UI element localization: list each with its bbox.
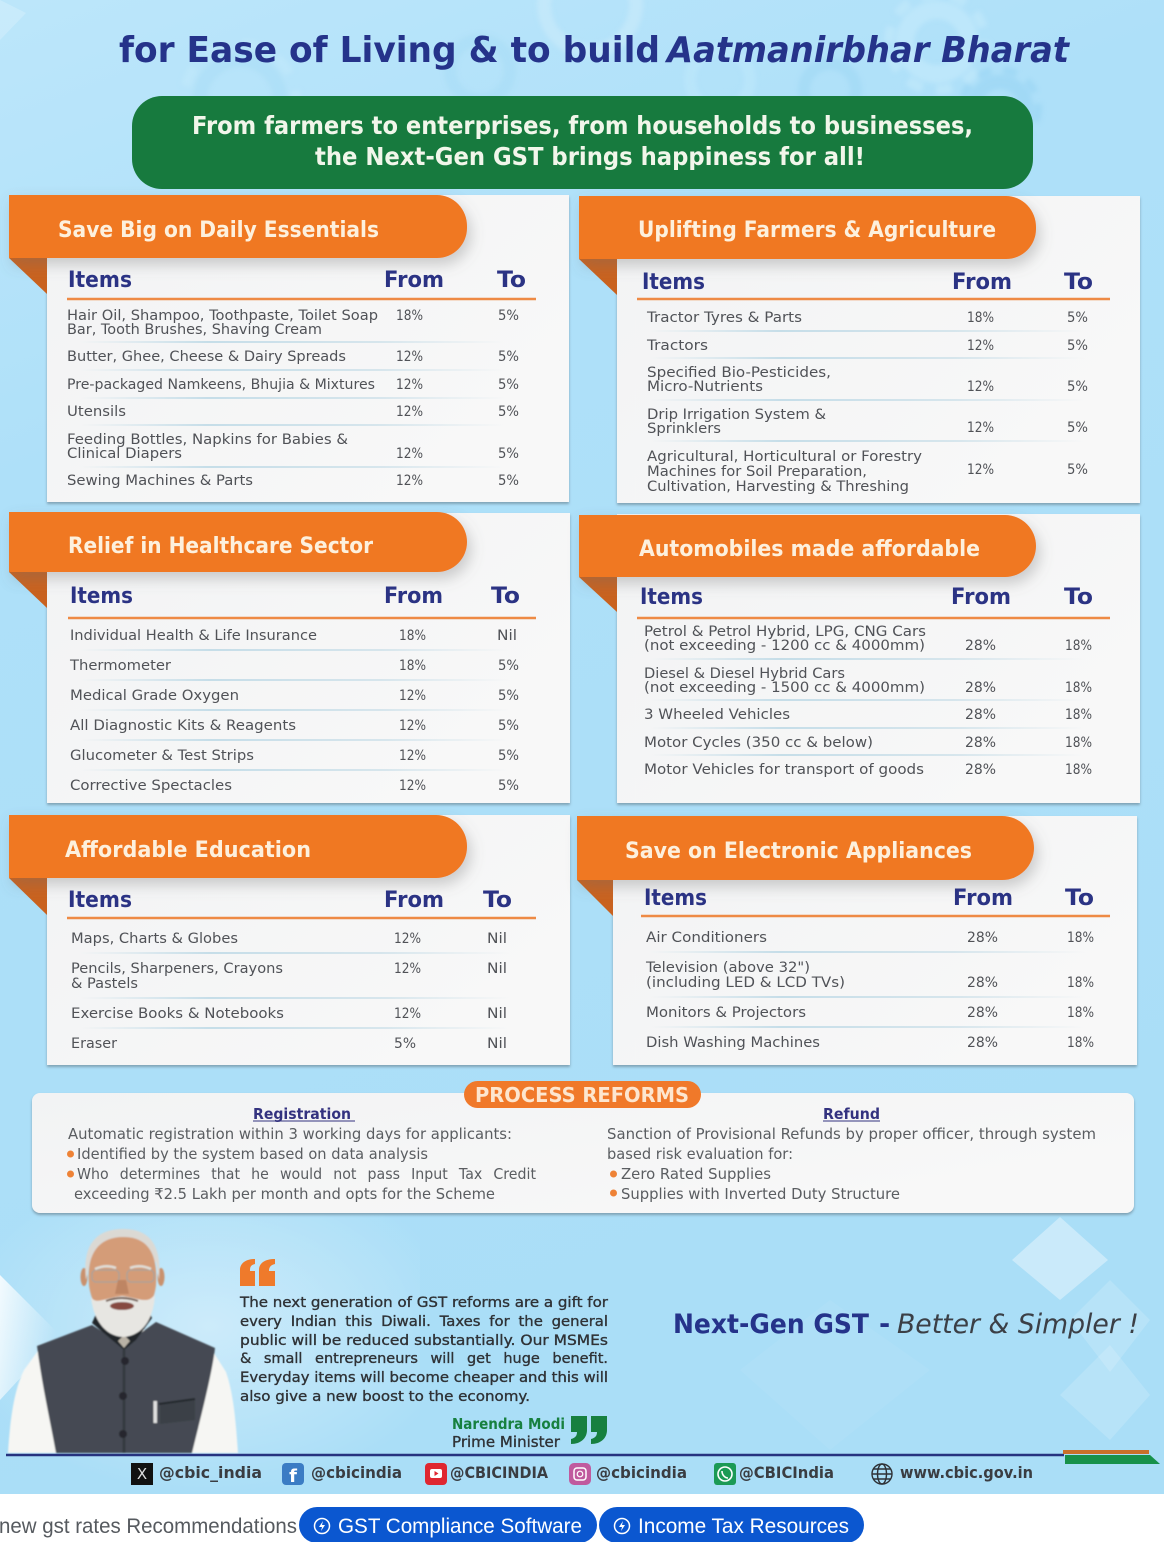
table rows: 5%	[498, 748, 519, 764]
quote text: Everyday items will become cheaper and this will	[240, 1370, 608, 1386]
handle: Facebook: @cbicindia	[311, 1463, 402, 1482]
icon: closing quote	[571, 1416, 607, 1444]
table rows: Diesel & Diesel Hybrid Cars	[644, 666, 845, 682]
table rows: Specified Bio-Pesticides,	[647, 365, 831, 381]
refund column: Supplies with Inverted Duty Structure	[621, 1185, 900, 1203]
table rows: Air Conditioners	[646, 930, 767, 946]
table header: To	[1065, 886, 1094, 911]
process reforms heading: PROCESS REFORMS	[475, 1083, 689, 1107]
table rows: 5%	[498, 473, 519, 489]
table header	[67, 888, 536, 918]
table rows: 5%	[498, 718, 519, 734]
table rows: Sewing Machines & Parts	[67, 473, 253, 489]
table header: Items	[640, 585, 703, 610]
table rows: 5%	[498, 404, 519, 420]
handle: Instagram: @cbicindia	[596, 1463, 687, 1482]
table rows: 12%	[396, 377, 423, 393]
tab heading	[579, 196, 1036, 259]
panel: Save Big on Daily Essentials	[9, 195, 569, 502]
table header: To	[483, 888, 512, 913]
table rows: 18%	[399, 658, 426, 674]
table rows: 18%	[1065, 680, 1092, 696]
table rows: 12%	[967, 462, 994, 478]
handle: WhatsApp: @CBICIndia	[739, 1463, 834, 1482]
table header	[68, 584, 536, 618]
social row	[131, 1463, 1033, 1487]
icon: X	[131, 1463, 153, 1485]
table rows: 12%	[399, 778, 426, 794]
table rows: Feeding Bottles, Napkins for Babies &	[67, 432, 348, 448]
refund column: Sanction of Provisional Refunds by proper officer, through system	[607, 1125, 1096, 1143]
table rows: 3 Wheeled Vehicles	[644, 707, 790, 723]
table header: From	[953, 886, 1013, 911]
table rows: 5%	[498, 308, 519, 324]
registration column	[67, 1105, 536, 1203]
tab heading	[9, 195, 467, 258]
table rows: 12%	[396, 473, 423, 489]
table rows: 18%	[1065, 707, 1092, 723]
tab heading: Save on Electronic Appliances	[625, 839, 972, 864]
table rows: Bar, Tooth Brushes, Shaving Cream	[67, 322, 322, 338]
table rows: 12%	[399, 718, 426, 734]
table rows: (including LED & LCD TVs)	[646, 975, 845, 991]
table rows	[71, 931, 510, 1052]
table rows: (not exceeding - 1200 cc & 4000mm)	[644, 638, 925, 654]
table rows: 18%	[1065, 638, 1092, 654]
tagline: Next-Gen GST	[673, 1309, 870, 1340]
table rows: Medical Grade Oxygen	[70, 688, 239, 704]
registration column: Who determines that he would not pass Input Tax Credit	[77, 1165, 536, 1183]
table rows: 12%	[396, 404, 423, 420]
table rows: 5%	[498, 446, 519, 462]
table rows: 12%	[396, 446, 423, 462]
quote text	[239, 1295, 608, 1405]
table rows: Utensils	[67, 404, 126, 420]
footer rule and flag	[6, 1450, 1160, 1464]
table rows: 5%	[498, 778, 519, 794]
table header: Items	[68, 268, 132, 293]
attribution: Narendra Modi	[452, 1415, 565, 1433]
tab heading	[9, 512, 467, 572]
table rows: 12%	[399, 688, 426, 704]
table rows: 12%	[399, 748, 426, 764]
table header	[637, 270, 1110, 299]
panel: Uplifting Farmers & Agriculture	[579, 196, 1140, 503]
icon: X: X	[137, 1465, 147, 1483]
table rows: Exercise Books & Notebooks	[71, 1006, 284, 1022]
tab heading	[577, 816, 1034, 880]
table rows: Pencils, Sharpeners, Crayons	[71, 961, 283, 977]
tab heading	[579, 515, 1036, 577]
table rows: Sprinklers	[647, 421, 721, 437]
table rows: 5%	[1067, 462, 1088, 478]
table rows	[69, 628, 519, 794]
table header	[637, 585, 1110, 618]
table rows: Nil	[487, 1036, 507, 1052]
icon: Facebook: f	[289, 1466, 297, 1487]
registration column: Automatic registration within 3 working days for applicants:	[68, 1125, 512, 1143]
tab heading: Uplifting Farmers & Agriculture	[638, 218, 996, 243]
table rows: 28%	[967, 1005, 998, 1021]
banner	[132, 96, 1033, 189]
quote text: also give a new boost to the economy.	[240, 1389, 530, 1405]
tab fold	[579, 259, 617, 295]
table header: From	[384, 584, 443, 609]
refund column	[607, 1105, 1096, 1203]
handle: X: @cbic_india	[159, 1463, 262, 1482]
pill: Income Tax Resources	[599, 1507, 864, 1542]
website: www.cbic.gov.in	[900, 1463, 1033, 1482]
table rows: Clinical Diapers	[67, 446, 182, 462]
table rows: 5%	[498, 688, 519, 704]
tab fold	[9, 258, 47, 294]
table rows: 5%	[1067, 338, 1088, 354]
icon: globe	[872, 1464, 892, 1484]
table rows: Motor Cycles (350 cc & below)	[644, 735, 873, 751]
table header: Items	[642, 270, 705, 295]
table rows: Eraser	[71, 1036, 117, 1052]
table rows: 12%	[967, 338, 994, 354]
table rows: 5%	[1067, 420, 1088, 436]
table rows: Tractors	[646, 338, 708, 354]
table rows: Machines for Soil Preparation,	[647, 464, 867, 480]
quote block	[239, 1259, 608, 1451]
table rows: 18%	[967, 310, 994, 326]
quote text: The next generation of GST reforms are a gift for	[239, 1295, 608, 1311]
registration column: Registration	[253, 1105, 351, 1123]
table rows: Micro-Nutrients	[647, 379, 763, 395]
panel: Relief in Healthcare Sector	[9, 512, 570, 803]
registration column: Identified by the system based on data analysis	[77, 1145, 428, 1163]
table header	[641, 886, 1110, 916]
pill: Income Tax Resources: Income Tax Resources	[638, 1514, 849, 1538]
table rows: Maps, Charts & Globes	[71, 931, 238, 947]
table rows: 18%	[1067, 930, 1094, 946]
table rows: 5%	[498, 349, 519, 365]
panel: Automobiles made affordable	[579, 514, 1140, 803]
table rows: Nil	[487, 961, 507, 977]
tab heading: Affordable Education	[65, 838, 311, 863]
table rows: Television (above 32")	[645, 960, 810, 976]
tab heading: Save Big on Daily Essentials	[58, 218, 379, 243]
panel: Affordable Education	[9, 815, 570, 1065]
table rows: 5%	[498, 377, 519, 393]
title emphasis: Aatmanirbhar Bharat	[664, 30, 1071, 71]
tab fold	[9, 572, 47, 608]
icon: YouTube	[425, 1463, 447, 1485]
table header: Items	[644, 886, 707, 911]
table rows: Thermometer	[69, 658, 171, 674]
table rows: 28%	[965, 735, 996, 751]
tab fold	[579, 577, 617, 612]
table rows: 28%	[967, 975, 998, 991]
registration column: exceeding ₹2.5 Lakh per month and opts for the Scheme	[74, 1185, 495, 1203]
table header: From	[384, 268, 444, 293]
table rows: Drip Irrigation System &	[647, 407, 826, 423]
icon: WhatsApp	[714, 1463, 736, 1485]
quote text: every Indian this Diwali. Taxes for the general	[240, 1314, 608, 1330]
table rows: Corrective Spectacles	[70, 778, 232, 794]
table rows: Dish Washing Machines	[646, 1035, 820, 1051]
table rows: Nil	[497, 628, 517, 644]
tagline: -	[879, 1309, 890, 1340]
table rows: 12%	[394, 1006, 421, 1022]
table rows: Pre-packaged Namkeens, Bhujia & Mixtures	[67, 377, 375, 393]
table rows: 28%	[965, 762, 996, 778]
table header: To	[491, 584, 520, 609]
table header: To	[497, 268, 526, 293]
refund column: Zero Rated Supplies	[621, 1165, 771, 1183]
table rows: 5%	[394, 1036, 416, 1052]
tab heading: Relief in Healthcare Sector	[68, 534, 373, 559]
table header: From	[952, 270, 1012, 295]
tab heading: Automobiles made affordable	[639, 537, 980, 562]
table rows: 18%	[1067, 975, 1094, 991]
handle: YouTube: @CBICINDIA	[450, 1463, 549, 1482]
table rows: 18%	[1067, 1005, 1094, 1021]
refund column: Refund	[823, 1105, 880, 1123]
table rows	[67, 308, 519, 489]
table rows: 12%	[394, 961, 421, 977]
icon: Instagram	[569, 1463, 591, 1485]
table rows: Agricultural, Horticultural or Forestry	[647, 449, 922, 465]
table rows: 12%	[394, 931, 421, 947]
banner: From farmers to enterprises, from households to businesses,	[192, 111, 973, 140]
table header	[67, 268, 536, 299]
table header: To	[1064, 270, 1093, 295]
table rows: All Diagnostic Kits & Reagents	[70, 718, 296, 734]
icon: Facebook	[282, 1463, 304, 1487]
tab fold	[577, 880, 613, 916]
panel: Save on Electronic Appliances	[577, 816, 1137, 1065]
table rows	[645, 930, 1094, 1051]
table rows: Cultivation, Harvesting & Threshing	[647, 479, 909, 495]
table rows: (not exceeding - 1500 cc & 4000mm)	[644, 680, 925, 696]
tab fold	[9, 878, 47, 915]
table rows: 12%	[967, 420, 994, 436]
table rows: Motor Vehicles for transport of goods	[644, 762, 924, 778]
banner: the Next-Gen GST brings happiness for all!	[315, 142, 865, 171]
table rows	[646, 310, 1088, 495]
table rows: 28%	[967, 1035, 998, 1051]
panel: process reforms	[32, 1081, 1134, 1213]
table rows: 5%	[1067, 379, 1088, 395]
table rows: Individual Health & Life Insurance	[70, 628, 317, 644]
table rows: 18%	[1067, 1035, 1094, 1051]
table rows: Hair Oil, Shampoo, Toothpaste, Toilet Soap	[67, 308, 378, 324]
bottom strip	[0, 1494, 1164, 1542]
table rows: 12%	[396, 349, 423, 365]
table rows: Glucometer & Test Strips	[70, 748, 254, 764]
pill: GST Compliance Software	[299, 1507, 597, 1542]
table rows: 18%	[399, 628, 426, 644]
table header: From	[384, 888, 444, 913]
title: for Ease of Living & to build	[119, 30, 660, 71]
quote text: public will be reduced substantially. Our MSMEs	[240, 1333, 608, 1349]
table rows	[644, 624, 1092, 778]
tab heading	[9, 815, 467, 878]
table header: From	[951, 585, 1011, 610]
table rows: 28%	[965, 638, 996, 654]
table rows: 18%	[1065, 735, 1092, 751]
search text: new gst rates Recommendations	[0, 1515, 297, 1538]
quote text: & small entrepreneurs will get huge benefit.	[240, 1351, 608, 1367]
table rows: 28%	[965, 707, 996, 723]
attribution	[452, 1415, 565, 1451]
table rows: Monitors & Projectors	[646, 1005, 806, 1021]
table rows: Nil	[487, 931, 507, 947]
refund column: based risk evaluation for:	[607, 1145, 793, 1163]
table rows: 28%	[967, 930, 998, 946]
attribution: Prime Minister	[452, 1433, 561, 1451]
table rows: & Pastels	[71, 976, 138, 992]
table rows: 18%	[396, 308, 423, 324]
icon: opening quote	[240, 1259, 275, 1286]
table rows: Nil	[487, 1006, 507, 1022]
table rows: 28%	[965, 680, 996, 696]
table header: To	[1064, 585, 1093, 610]
table rows: 5%	[1067, 310, 1088, 326]
table header: Items	[70, 584, 133, 609]
table rows: 12%	[967, 379, 994, 395]
tagline	[673, 1309, 1139, 1340]
table rows: Butter, Ghee, Cheese & Dairy Spreads	[67, 349, 346, 365]
table rows: Tractor Tyres & Parts	[646, 310, 802, 326]
pill: GST Compliance Software: GST Compliance Software	[338, 1514, 582, 1538]
table rows: Petrol & Petrol Hybrid, LPG, CNG Cars	[644, 624, 926, 640]
tagline: Better & Simpler !	[897, 1309, 1139, 1340]
table header: Items	[68, 888, 132, 913]
table rows: 5%	[498, 658, 519, 674]
table rows: 18%	[1065, 762, 1092, 778]
portrait	[8, 1229, 238, 1453]
